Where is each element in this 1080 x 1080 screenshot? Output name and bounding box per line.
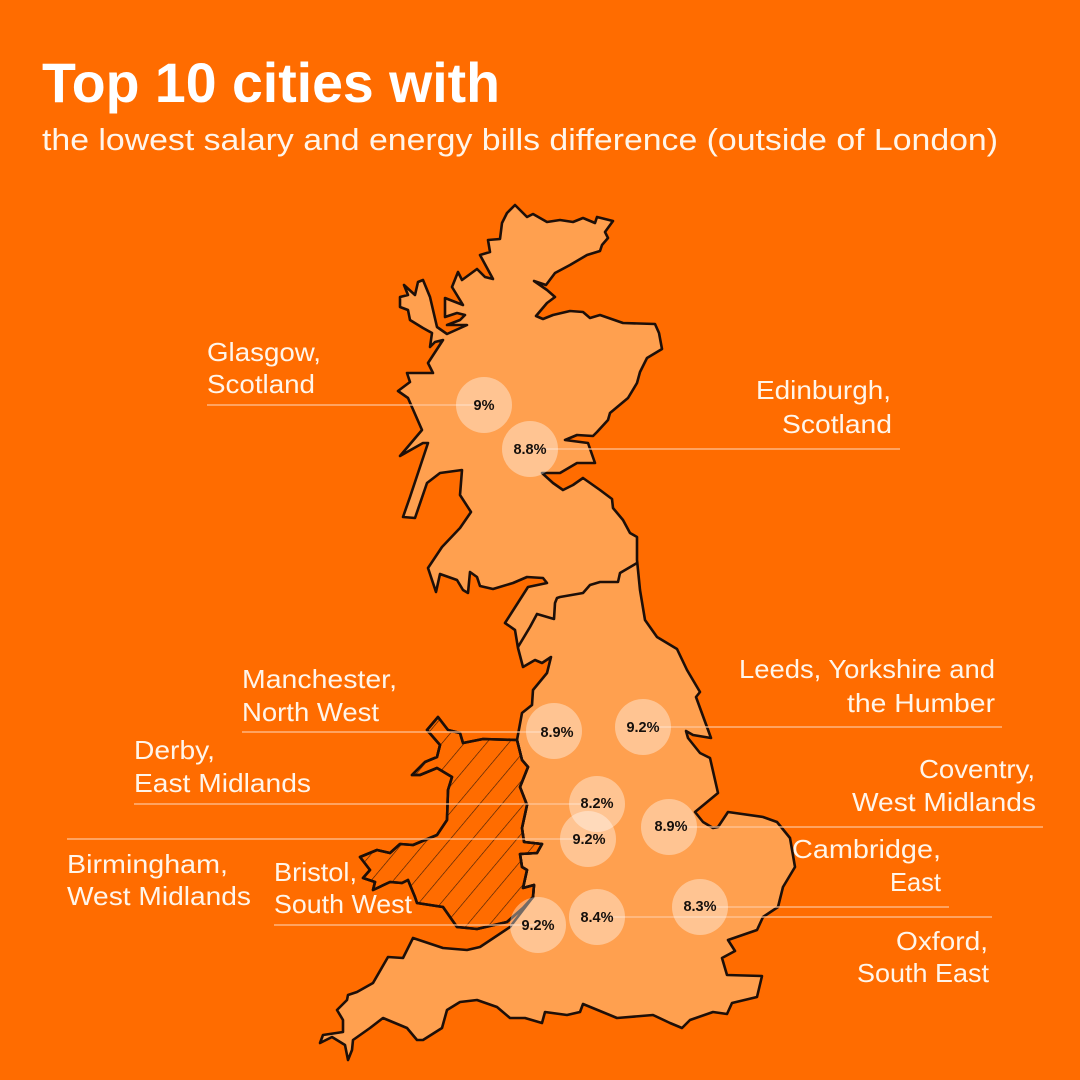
Wales region [360,717,542,929]
marker: Coventry 8.9% [641,799,697,855]
label: Glasgow: Scotland [207,369,315,399]
marker: Cambridge 8.3% [672,879,728,935]
label: Manchester: North West [242,697,380,727]
marker: Manchester 8.9% [526,703,582,759]
marker: Coventry 8.9%: 8.9% [654,819,688,835]
label: Edinburgh: Scotland [782,409,892,439]
label: Edinburgh: Edinburgh, [756,375,891,405]
label: Coventry [669,754,1043,827]
marker: Bristol 9.2% [510,897,566,953]
label: Birmingham: Birmingham, [67,849,228,879]
title: Top 10 cities with [42,51,500,114]
England and Scotland border [518,563,637,647]
label: Manchester: Manchester, [242,664,397,694]
marker: Oxford 8.4%: 8.4% [580,910,614,926]
label: Manchester [242,664,554,732]
label: Coventry: Coventry, [919,754,1035,784]
label: Leeds [643,654,1002,727]
mainland landmass: Scotland and England [320,205,795,1060]
label: Birmingham: West Midlands [67,881,251,911]
label: Glasgow: Glasgow, [207,337,321,367]
label: Oxford: Oxford, [896,926,988,956]
label: Birmingham [67,839,588,911]
marker: Bristol 9.2%: 9.2% [521,918,555,934]
marker: Derby 8.2% [569,776,625,832]
marker: Edinburgh 8.8% [502,421,558,477]
label: Derby: East Midlands [134,768,311,798]
label: Edinburgh [530,375,900,449]
map of Great Britain [320,205,795,1060]
marker: Birmingham 9.2% [560,811,616,867]
label: Bristol [274,857,538,925]
label: Cambridge: East [890,867,942,897]
marker: Edinburgh 8.8%: 8.8% [513,442,547,458]
marker: Oxford 8.4% [569,889,625,945]
label: Cambridge [700,834,949,907]
label: Oxford: South East [857,958,990,988]
label: Cambridge: Cambridge, [792,834,941,864]
label: Oxford [597,917,992,988]
marker: Manchester 8.9%: 8.9% [540,725,574,741]
marker: Derby 8.2%: 8.2% [580,796,614,812]
label: Leeds: Leeds, Yorkshire and [739,654,995,684]
subtitle: the lowest salary and energy bills difference (outside of London) [42,122,998,157]
marker: Glasgow 9%: 9% [474,398,495,414]
label: Glasgow [207,337,484,405]
marker: Cambridge 8.3%: 8.3% [683,899,717,915]
label: Derby: Derby, [134,735,215,765]
label: Leeds: the Humber [847,688,995,718]
marker: Glasgow 9% [456,377,512,433]
label: Bristol: South West [274,889,413,919]
marker: Leeds 9.2% [615,699,671,755]
label: Bristol: Bristol, [274,857,357,887]
label: Coventry: West Midlands [852,787,1036,817]
label: Derby [134,735,597,804]
marker: Leeds 9.2%: 9.2% [626,720,660,736]
marker: Birmingham 9.2%: 9.2% [572,832,606,848]
